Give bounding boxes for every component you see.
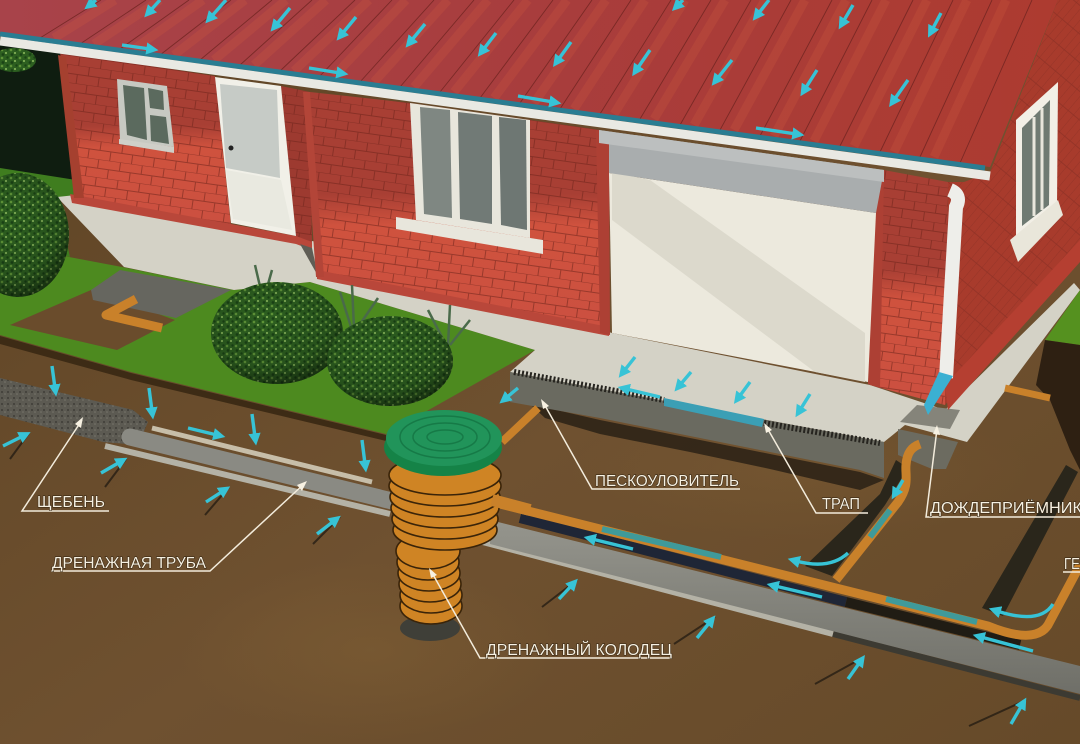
label: дренажный колодец: ДРЕНАЖНЫЙ КОЛОДЕЦ xyxy=(486,640,672,659)
drainage well xyxy=(384,410,530,641)
label: пескоуловитель: ПЕСКОУЛОВИТЕЛЬ xyxy=(595,473,739,490)
label: дождеприёмник xyxy=(926,425,1080,517)
downspout xyxy=(924,190,958,415)
roof water arrows xyxy=(91,0,941,134)
soil pit with short pipe xyxy=(10,270,231,350)
door xyxy=(215,77,296,236)
roof xyxy=(0,0,1058,167)
label: пескоуловитель xyxy=(541,399,740,490)
right wall window xyxy=(1010,82,1063,262)
label: дренажный колодец xyxy=(429,568,672,659)
ground arrow shadows xyxy=(10,433,1026,726)
label: трап xyxy=(764,423,868,513)
concrete walkway xyxy=(57,195,1080,442)
lawn xyxy=(0,240,535,441)
large window xyxy=(396,103,543,254)
bushes and grass xyxy=(0,173,470,406)
label: трап: ТРАП xyxy=(822,496,860,513)
orange pipes xyxy=(492,388,1080,635)
label: дождеприёмник: ДОЖДЕПРИЁМНИК xyxy=(930,499,1080,517)
right drain pipe xyxy=(475,518,1080,698)
left drain pipe xyxy=(105,428,392,514)
label: щебень: ЩЕБЕНЬ xyxy=(37,494,105,511)
gutter xyxy=(0,34,990,176)
front brick walls xyxy=(58,52,948,405)
label: дренажная труба xyxy=(51,481,307,572)
rain grate block xyxy=(510,372,884,490)
gravel trench xyxy=(0,378,148,445)
shadows of pipes xyxy=(805,460,1078,616)
rain inlet xyxy=(898,405,960,469)
label: щебень xyxy=(22,417,109,511)
garage door xyxy=(599,130,884,382)
right wall xyxy=(945,0,1080,410)
background shade and far lawn xyxy=(0,40,1080,470)
label: дренажная труба: ДРЕНАЖНАЯ ТРУБА xyxy=(52,555,206,572)
small window xyxy=(117,79,174,153)
ground and pipe water arrows xyxy=(3,357,1053,724)
